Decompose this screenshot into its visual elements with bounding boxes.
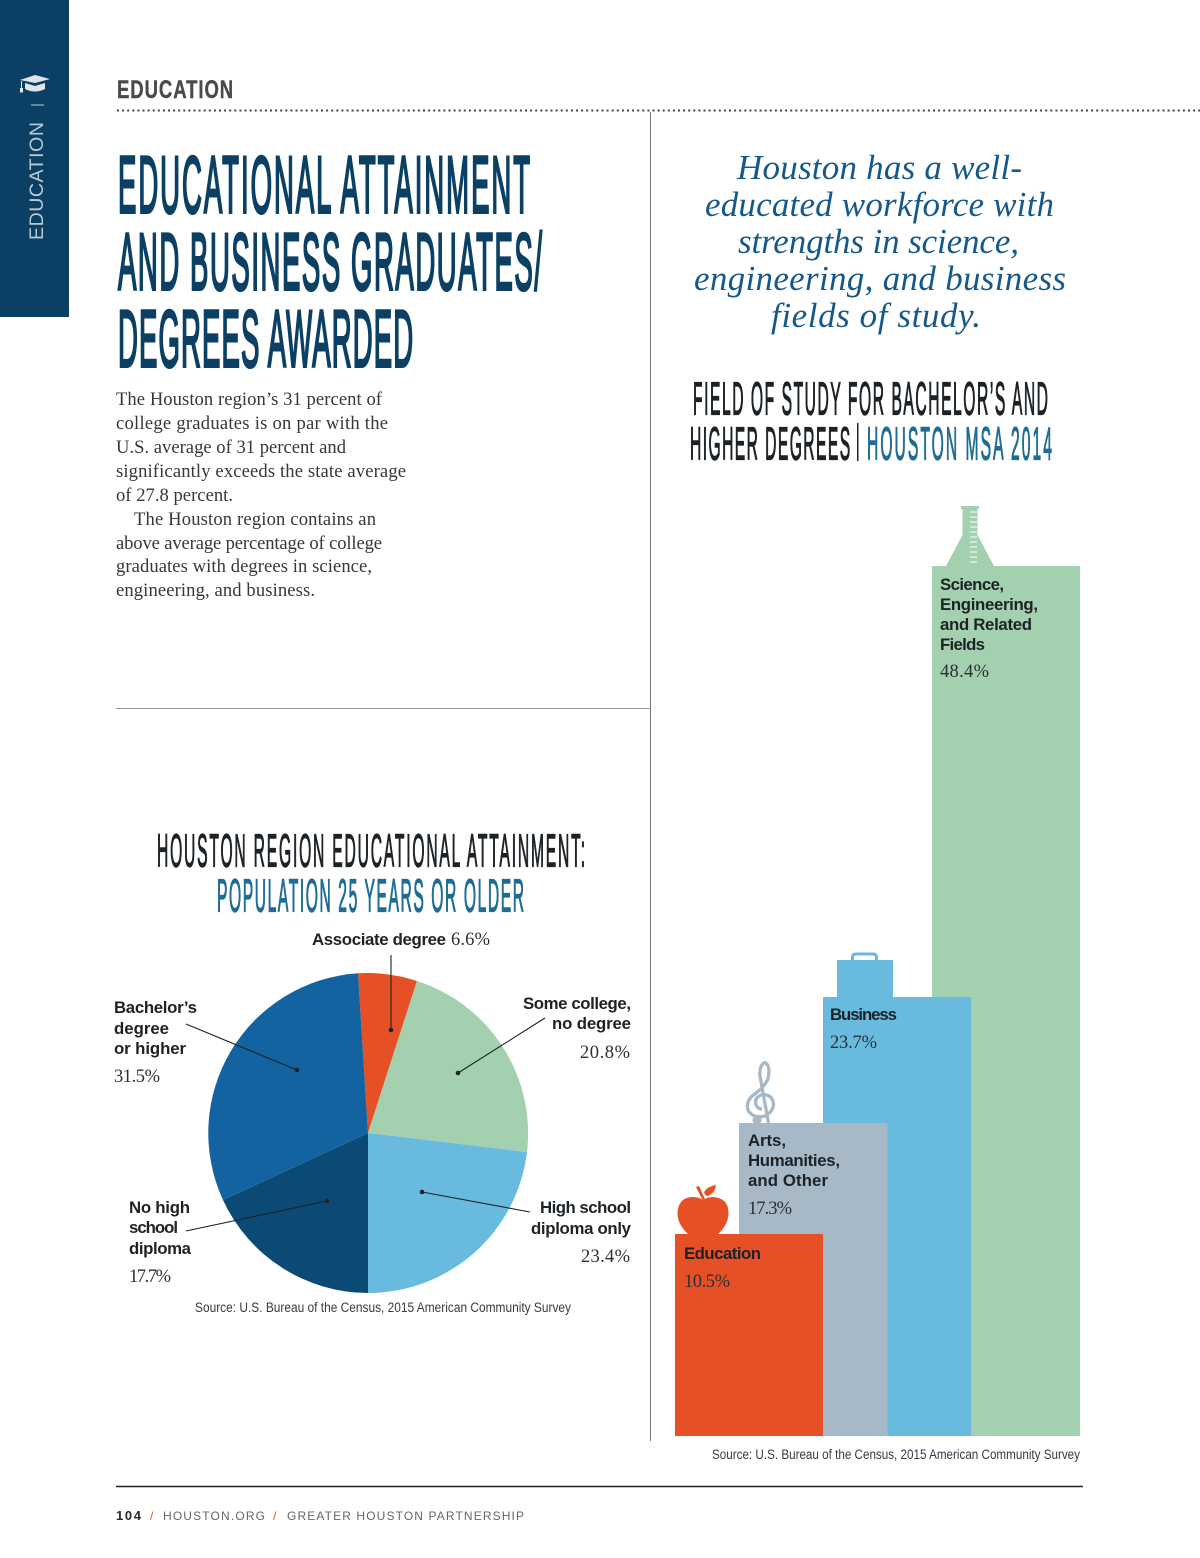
title: EDUCATIONAL ATTAINMENT xyxy=(118,139,530,230)
label: some college: Some college, xyxy=(523,994,631,1013)
body text: The Houston region’s 31 percent of xyxy=(116,389,383,410)
bar: arts, humanities: Arts, xyxy=(748,1131,786,1150)
bar: arts, humanities: 17.3% xyxy=(748,1199,792,1219)
body text: The Houston region contains an xyxy=(134,509,377,530)
pull quote: engineering, and business xyxy=(694,259,1066,298)
title: AND BUSINESS GRADUATES/ xyxy=(118,216,542,307)
label: bachelor's: 31.5% xyxy=(114,1067,160,1087)
bar: science, engineering: Science, xyxy=(940,575,1004,594)
label: associate degree: Associate degree xyxy=(312,930,446,949)
body text: U.S. average of 31 percent and xyxy=(116,437,347,458)
pie chart heading: HOUSTON REGION EDUCATIONAL ATTAINMENT: xyxy=(157,826,585,877)
bar: science, engineering: 48.4% xyxy=(940,662,989,682)
footer xyxy=(116,1508,524,1523)
bar: business xyxy=(823,954,971,1436)
body text: above average percentage of college xyxy=(116,533,382,554)
footer: HOUSTON.ORG xyxy=(163,1509,265,1523)
bar: business: Business xyxy=(830,1005,897,1024)
body text: engineering, and business. xyxy=(116,580,315,601)
bar chart heading xyxy=(690,374,1052,470)
slice: no high school xyxy=(223,1133,368,1293)
pull quote: educated workforce with xyxy=(705,185,1054,224)
footer: GREATER HOUSTON PARTNERSHIP xyxy=(287,1509,524,1523)
slice: bachelor's xyxy=(208,973,368,1200)
icon: flask xyxy=(946,506,994,566)
pie chart source: Source: U.S. Bureau of the Census, 2015 American Community Survey xyxy=(195,1300,571,1315)
bar: arts, humanities xyxy=(739,1062,888,1436)
pull quote: fields of study. xyxy=(771,296,981,335)
label: high school: High school xyxy=(540,1198,631,1217)
body text: college graduates is on par with the xyxy=(116,413,388,434)
bar: education xyxy=(675,1185,823,1436)
section heading: EDUCATION xyxy=(117,75,233,104)
bar: education: 10.5% xyxy=(684,1272,730,1292)
pull quote xyxy=(694,148,1066,335)
label: bachelor's xyxy=(114,998,197,1087)
label: bachelor's: Bachelor’s xyxy=(114,998,197,1017)
pull quote: Houston has a well- xyxy=(736,148,1022,187)
bar chart source: Source: U.S. Bureau of the Census, 2015 American Community Survey xyxy=(712,1447,1080,1462)
label: no high school: diploma xyxy=(129,1239,192,1258)
footer: / xyxy=(150,1509,154,1523)
title xyxy=(118,139,542,384)
label: no high school: school xyxy=(129,1218,178,1237)
label: high school xyxy=(531,1198,632,1267)
pie chart heading: POPULATION 25 YEARS OR OLDER xyxy=(217,871,524,922)
bar: arts, humanities: Humanities, xyxy=(748,1151,840,1170)
body text: of 27.8 percent. xyxy=(116,485,233,506)
bar: science, engineering xyxy=(932,506,1080,1436)
slice: high school xyxy=(368,1133,527,1293)
bar: education: Education xyxy=(684,1244,761,1263)
pull quote: strengths in science, xyxy=(738,222,1019,261)
label: some college xyxy=(523,994,631,1063)
footer: / xyxy=(273,1509,277,1523)
label: no high school xyxy=(129,1198,192,1287)
bar chart heading: HOUSTON MSA 2014 xyxy=(867,419,1052,470)
label: some college: no degree xyxy=(552,1014,631,1033)
leader lines xyxy=(186,955,545,1231)
bar: science, engineering: Fields xyxy=(940,635,985,654)
label: some college: 20.8% xyxy=(580,1043,630,1063)
label: bachelor's: degree xyxy=(114,1019,169,1038)
icon: briefcase xyxy=(837,954,893,998)
label: associate degree: 6.6% xyxy=(451,930,490,950)
sidebar label: EDUCATION xyxy=(26,122,48,240)
label: bachelor's: or higher xyxy=(114,1039,186,1058)
label: no high school: 17.7% xyxy=(129,1267,171,1287)
bar chart: field of study xyxy=(675,506,1080,1436)
bar: science, engineering: and Related xyxy=(940,615,1032,634)
label: high school: 23.4% xyxy=(581,1247,630,1267)
slice: some college xyxy=(368,981,528,1152)
body text: graduates with degrees in science, xyxy=(116,556,372,577)
bar: arts, humanities: and Other xyxy=(748,1171,828,1190)
body text: significantly exceeds the state average xyxy=(116,461,406,482)
footer: 104 xyxy=(116,1508,142,1523)
label: no high school: No high xyxy=(129,1198,190,1217)
slice: associate degree xyxy=(358,973,417,1133)
title: DEGREES AWARDED xyxy=(118,293,413,384)
bar chart heading: FIELD OF STUDY FOR BACHELOR’S AND xyxy=(693,374,1048,425)
icon: treble clef xyxy=(747,1062,774,1124)
bar: science, engineering: Engineering, xyxy=(940,595,1038,614)
icon: apple xyxy=(677,1185,729,1234)
panel: sidebar tab xyxy=(0,0,69,317)
bar chart heading: HIGHER DEGREES xyxy=(690,419,850,470)
pie chart heading xyxy=(157,826,585,922)
body text xyxy=(116,389,406,601)
bar: business: 23.7% xyxy=(830,1033,877,1053)
icon: graduation cap xyxy=(20,75,50,92)
label: high school: diploma only xyxy=(531,1219,632,1238)
pie chart: educational attainment xyxy=(186,955,545,1293)
